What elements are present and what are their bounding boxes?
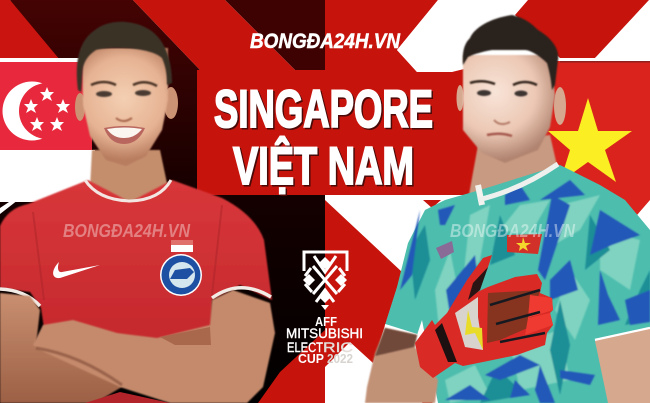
finger seams <box>490 290 545 342</box>
player: Vietnam <box>365 15 650 403</box>
face <box>82 48 168 166</box>
ears <box>75 87 178 121</box>
hair <box>463 15 558 90</box>
right arm <box>595 329 650 403</box>
neck <box>90 150 168 204</box>
Cup 2022 text: 2022 <box>327 352 353 366</box>
ears <box>456 85 566 125</box>
player: Singapore <box>0 22 275 403</box>
title: Viet Nam: VIỆT NAM <box>234 136 416 198</box>
eyes and brows <box>470 81 537 136</box>
site logo: BONGĐA24H.VN <box>250 30 401 53</box>
watermark right: BONGĐA24H.VN <box>450 221 576 241</box>
title: Singapore <box>214 80 434 140</box>
flag patch <box>507 234 542 254</box>
Electric text <box>287 340 353 355</box>
Electric text: ELECT <box>287 340 323 355</box>
title: Singapore: SINGAPORE <box>214 80 433 139</box>
palm <box>487 290 540 343</box>
smile <box>104 126 145 144</box>
folded arm <box>33 290 275 403</box>
neck <box>468 135 558 205</box>
collar <box>478 185 482 205</box>
crescent <box>2 82 75 140</box>
AFF text: AFF <box>315 315 337 329</box>
Cup 2022 text <box>298 352 353 366</box>
grey panel <box>455 297 483 350</box>
star <box>548 98 632 182</box>
crest flag <box>171 240 193 252</box>
title: Viet Nam: VIỆT NAM <box>233 135 414 196</box>
wrist strap <box>435 323 457 362</box>
forearm <box>365 328 438 403</box>
title: Singapore: SINGAPORE <box>216 82 434 140</box>
left arm <box>0 293 125 403</box>
sleeve trim <box>385 325 417 335</box>
stars <box>24 87 70 131</box>
swoosh <box>53 262 100 278</box>
face <box>463 55 555 163</box>
flag: Singapore <box>0 58 95 202</box>
collar <box>85 180 171 201</box>
finger pads <box>525 295 553 335</box>
eyes and brows <box>91 82 157 121</box>
sleeve bands <box>0 289 40 306</box>
arms <box>0 290 275 403</box>
flag: Vietnam <box>500 10 650 215</box>
jersey <box>0 180 272 345</box>
Mitsubishi text: MITSUBISHI <box>286 326 363 341</box>
yellow bolt <box>465 310 483 350</box>
hair <box>77 22 172 92</box>
crest <box>436 241 454 259</box>
jersey <box>385 164 650 403</box>
watermark left: BONGĐA24H.VN <box>63 221 191 241</box>
glove <box>415 255 553 378</box>
Electric text: RIC <box>323 340 353 355</box>
AFF logo <box>303 252 347 310</box>
Cup 2022 text: CUP <box>298 352 324 366</box>
title: Viet Nam <box>233 135 416 198</box>
thumb <box>468 267 488 300</box>
FAS crest <box>160 254 202 296</box>
